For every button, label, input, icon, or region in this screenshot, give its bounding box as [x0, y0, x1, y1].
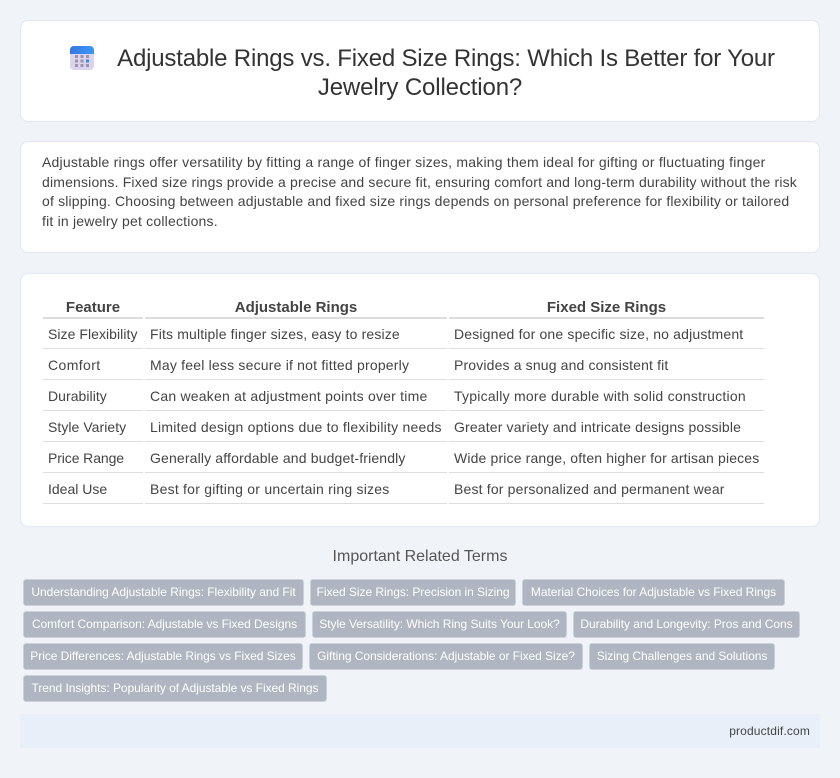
row: Style Variety: Limited design options due to flexibility needs: [150, 419, 442, 435]
row: Ideal Use: Best for personalized and permanent wear: [454, 481, 725, 497]
footer source text: productdif.com: [729, 724, 810, 738]
table header: Feature: Feature: [66, 299, 120, 316]
tag: Style Versatility: Which Ring Suits Your Look?: [319, 617, 560, 631]
row: Price Range: [43, 450, 764, 473]
tag: Durability and Longevity: Pros and Cons: [580, 617, 793, 631]
tag: Understanding Adjustable Rings: Flexibility and Fit: [31, 585, 296, 599]
icon: calendar: [70, 46, 94, 70]
tag: [589, 643, 775, 670]
tag: [312, 611, 567, 638]
row: Comfort: Comfort: [48, 357, 101, 373]
tag: Sizing Challenges and Solutions: [597, 649, 767, 663]
row: Size Flexibility: Fits multiple finger sizes, easy to resize: [150, 326, 400, 342]
table header: Feature: [43, 295, 143, 319]
tag: [23, 611, 306, 638]
row: Ideal Use: Best for gifting or uncertain ring sizes: [150, 481, 390, 497]
row: Comfort: May feel less secure if not fitted properly: [150, 357, 409, 373]
row: Size Flexibility: Designed for one specific size, no adjustment: [454, 326, 743, 342]
title: Jewelry Collection?: [318, 74, 522, 101]
row: Durability: Typically more durable with solid construction: [454, 388, 746, 404]
title: [117, 45, 775, 101]
table header: Adjustable Rings: Adjustable Rings: [235, 299, 357, 316]
row: Ideal Use: Ideal Use: [48, 481, 107, 497]
tag: [522, 579, 785, 606]
heading: related terms: Important Related Terms: [333, 548, 507, 565]
row: Price Range: Wide price range, often higher for artisan pieces: [454, 450, 759, 466]
table header: Adjustable Rings: [145, 295, 447, 319]
footer bar: [20, 714, 820, 748]
table header: Fixed Size Rings: Fixed Size Rings: [547, 299, 666, 316]
tag: Price Differences: Adjustable Rings vs Fixed Sizes: [30, 649, 296, 663]
tag: [310, 579, 516, 606]
table header: Fixed Size Rings: [449, 295, 764, 319]
tag: Material Choices for Adjustable vs Fixed Rings: [531, 585, 776, 599]
row: Durability: Can weaken at adjustment points over time: [150, 388, 428, 404]
row: Comfort: [43, 357, 764, 380]
row: Ideal Use: [43, 481, 764, 504]
tag: Comfort Comparison: Adjustable vs Fixed Designs: [32, 617, 297, 631]
row: Style Variety: Greater variety and intricate designs possible: [454, 419, 741, 435]
intro text: [42, 154, 797, 229]
row: Durability: [43, 388, 764, 411]
tag list: related terms: [23, 579, 800, 702]
title: Adjustable Rings vs. Fixed Size Rings: Which Is Better for Your: [117, 45, 775, 72]
panel: header: [20, 20, 820, 122]
tag: Gifting Considerations: Adjustable or Fixed Size?: [317, 649, 575, 663]
row: Durability: Durability: [48, 388, 107, 404]
row: Style Variety: [43, 419, 764, 442]
intro text: dimensions. Fixed size rings provide a precise and secure fit, ensuring comfort and long-term durability without the risk: [42, 174, 797, 190]
tag: [23, 579, 304, 606]
tag: [309, 643, 583, 670]
row: Comfort: Provides a snug and consistent fit: [454, 357, 668, 373]
tag: [23, 675, 327, 702]
intro text: of slipping. Choosing between adjustable and fixed size rings depends on personal preference for flexibility or tailored: [42, 193, 789, 209]
row: Size Flexibility: Size Flexibility: [48, 326, 138, 342]
tag: Trend Insights: Popularity of Adjustable vs Fixed Rings: [32, 681, 318, 695]
tag: [23, 643, 303, 670]
row: Price Range: Price Range: [48, 450, 124, 466]
row: Price Range: Generally affordable and budget-friendly: [150, 450, 406, 466]
row: Style Variety: Style Variety: [48, 419, 126, 435]
intro text: Adjustable rings offer versatility by fitting a range of finger sizes, making them ideal for gifting or fluctuating finger: [42, 154, 765, 170]
tag: [573, 611, 800, 638]
panel: comparison table: [20, 273, 820, 527]
tag: Fixed Size Rings: Precision in Sizing: [317, 585, 509, 599]
intro text: fit in jewelry pet collections.: [42, 213, 218, 229]
panel: intro paragraph: [20, 141, 820, 253]
row: Size Flexibility: [43, 326, 764, 349]
